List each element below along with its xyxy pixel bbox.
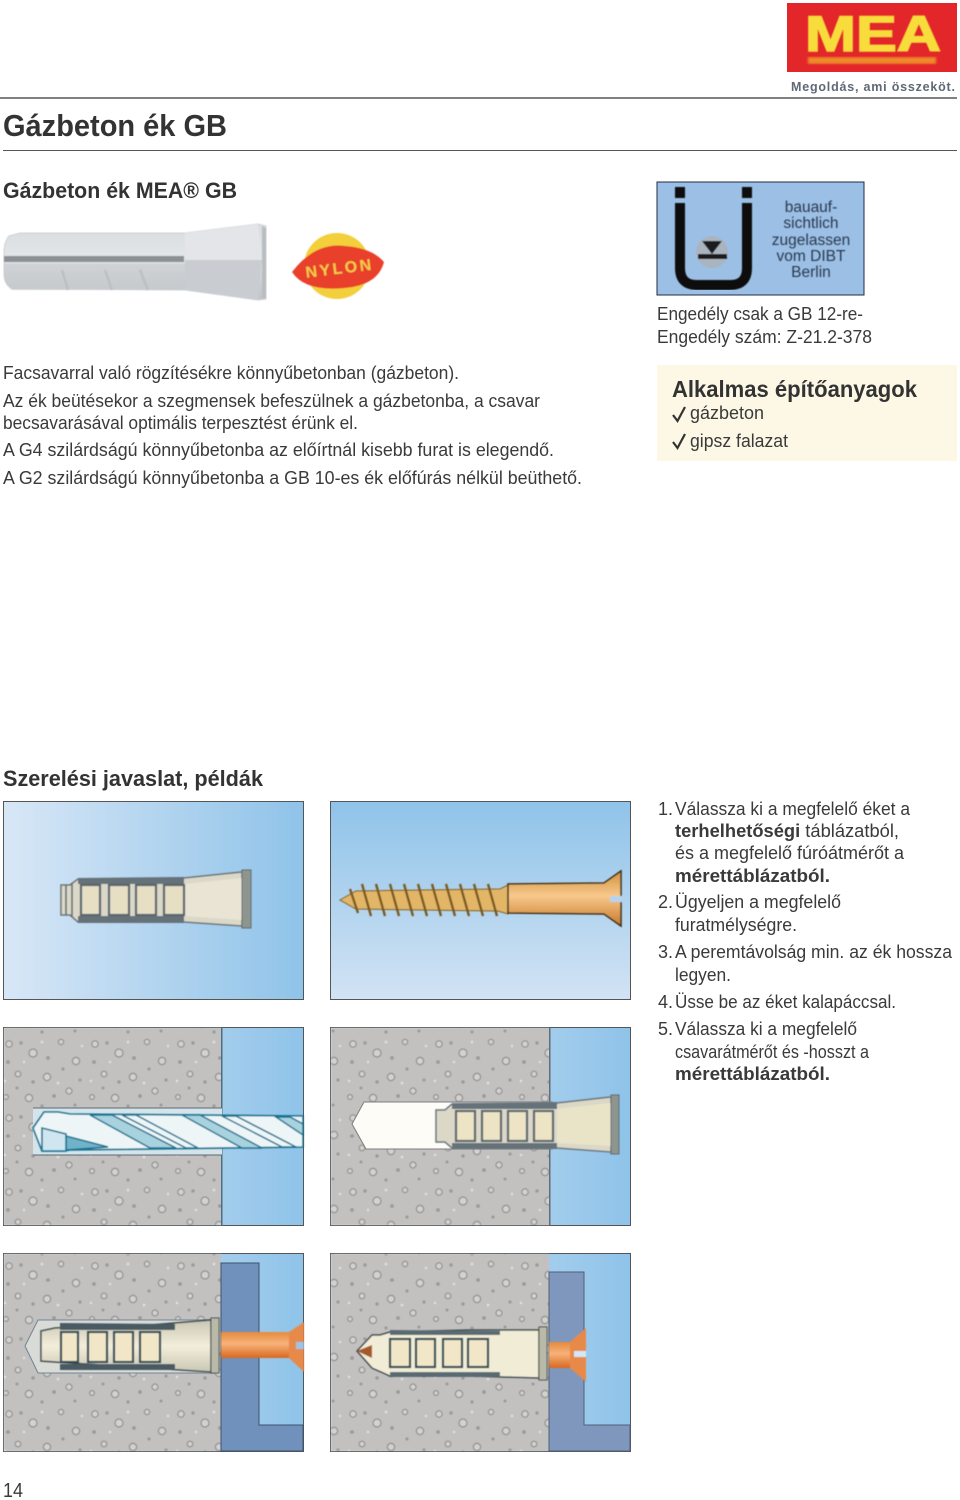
dowel and screw (41, 1318, 304, 1373)
logo: MEA: MEA (805, 6, 941, 62)
panel: suitable materials (657, 365, 957, 461)
numbered instructions: Üsse be az éket kalapáccsal. (675, 992, 896, 1012)
intro text: Facsavarral való rögzítésékre könnyűbetonban (gázbeton). (3, 363, 459, 383)
badge: nylon: NYLON (305, 257, 372, 282)
numbered instructions: 2. (658, 892, 673, 912)
screw drawing (340, 871, 622, 926)
certificate text: zugelassen (772, 232, 850, 249)
numbered instructions: mérettáblázatból. (675, 1064, 830, 1084)
numbered instructions: legyen. (675, 965, 731, 985)
numbered instructions: 1. (658, 799, 673, 819)
certificate text: Berlin (791, 264, 831, 281)
dowel drawing (436, 1095, 619, 1154)
certificate text: vom DIBT (777, 248, 846, 265)
icon: check (673, 407, 685, 421)
panel: drilling (4, 1028, 304, 1226)
certificate text: bauauf- (785, 199, 837, 216)
installation heading: Szerelési javaslat, példák (3, 766, 264, 791)
certificate text: sichtlich (783, 215, 839, 232)
badge: nylon (292, 233, 384, 299)
intro text (3, 363, 582, 488)
mounted plate (549, 1272, 630, 1451)
drill bit (33, 1112, 303, 1151)
title: Gázbeton ék GB (3, 108, 227, 143)
mounted plate (221, 1263, 303, 1451)
intro text: A G4 szilárdságú könnyűbetonba az előírtnál kisebb furat is elegendő. (3, 440, 554, 460)
panel: inserting dowel (330, 1028, 630, 1226)
certificate: DIBT approval (657, 182, 864, 295)
panel: dowel (4, 802, 304, 1000)
numbered instructions: 5. (658, 1019, 673, 1039)
numbered instructions: Válassza ki a megfelelő (675, 1019, 857, 1039)
approval note: Engedély csak a GB 12-re- (657, 304, 863, 324)
product photo: dowel (4, 224, 266, 300)
dowel and screw (357, 1327, 586, 1382)
numbered instructions: Ügyeljen a megfelelő (675, 892, 841, 912)
header rule (0, 97, 957, 99)
intro text: becsavarásával optimális terpesztést érünk el. (3, 413, 358, 433)
approval note (657, 304, 872, 347)
numbered instructions: 4. (658, 992, 673, 1012)
dowel drawing (61, 870, 251, 928)
numbered instructions: mérettáblázatból. (675, 866, 830, 886)
title rule (3, 150, 957, 151)
panel: suitable materials: gipsz falazat (690, 431, 788, 451)
numbered instructions: és a megfelelő fúróátmérőt a (675, 843, 905, 863)
numbered instructions (658, 799, 953, 1084)
numbered instructions: furatmélységre. (675, 915, 797, 935)
numbered instructions: Válassza ki a megfelelő éket a (675, 799, 911, 819)
materials heading: Alkalmas építőanyagok (672, 376, 917, 402)
numbered instructions: A peremtávolság min. az ék hossza (675, 942, 953, 962)
product heading: Gázbeton ék MEA® GB (3, 178, 237, 203)
icon: U mark (675, 187, 752, 285)
panel: mounted screw in dowel (4, 1254, 304, 1452)
numbered instructions: csavarátmérőt és -hosszt a (675, 1042, 870, 1062)
certificate text (772, 199, 850, 281)
logo: MEA (787, 3, 957, 72)
numbered instructions: terhelhetőségi táblázatból, (675, 821, 899, 841)
tagline: Megoldás, ami összeköt. (791, 80, 955, 94)
approval note: Engedély szám: Z-21.2-378 (657, 327, 872, 347)
intro text: A G2 szilárdságú könnyűbetonba a GB 10-es ék előfúrás nélkül beüthető. (3, 468, 582, 488)
icon: check (673, 434, 685, 448)
panel: finished fixing (330, 1254, 630, 1452)
intro text: Az ék beütésekor a szegmensek befeszülnek a gázbetonba, a csavar (3, 391, 540, 411)
panel: screw (330, 802, 630, 1000)
panel: suitable materials: gázbeton (690, 403, 764, 423)
numbered instructions: 3. (658, 942, 673, 962)
